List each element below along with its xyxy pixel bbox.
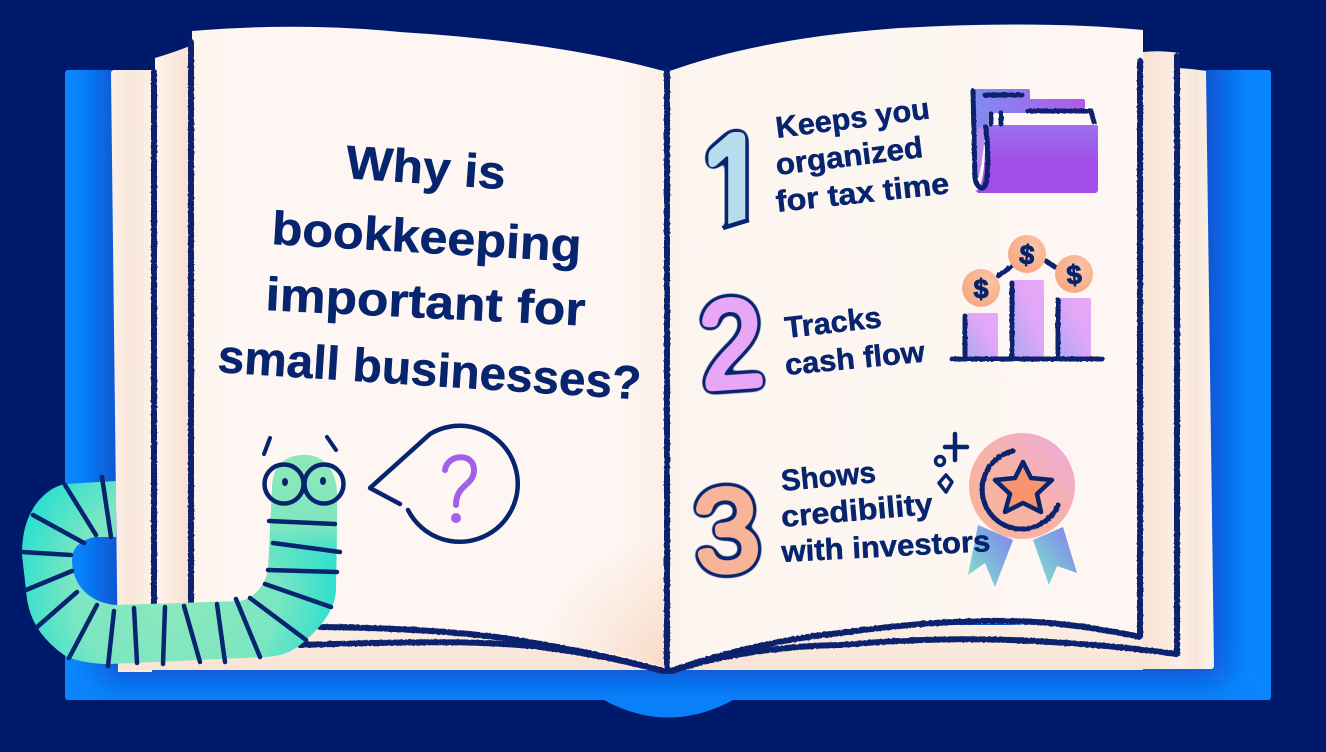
icon: bar chart with coins: $ — [1065, 259, 1083, 291]
item 3 text: credibility — [780, 488, 934, 534]
numeral 1 — [704, 128, 750, 230]
title: important for — [265, 267, 587, 336]
item 1 text: for tax time — [774, 167, 951, 219]
item 3 text — [780, 456, 991, 569]
item 3 text: with investors — [780, 525, 991, 569]
left page — [192, 27, 667, 668]
right page — [667, 24, 1143, 668]
numeral 1: 1 — [699, 100, 770, 279]
worm stripes — [22, 477, 340, 666]
numeral 2: 2 — [695, 274, 768, 416]
icon: folder — [973, 89, 1098, 193]
icon: bar chart with coins — [952, 235, 1102, 359]
item 2 text — [783, 301, 927, 382]
item 2 text: Tracks — [783, 301, 883, 345]
item 1 text: organized — [774, 131, 925, 182]
title — [216, 135, 643, 409]
worm — [22, 437, 344, 666]
book outline strokes — [154, 42, 1177, 671]
title: small businesses? — [216, 329, 643, 409]
page gutter shading — [567, 572, 664, 668]
worm eyes — [264, 437, 344, 504]
item 3 text: Shows — [780, 456, 877, 498]
speech bubble with question mark — [370, 426, 518, 542]
item 1 text: Keeps you — [774, 93, 932, 145]
page stacks — [111, 46, 1214, 672]
numeral 3: 3 — [690, 463, 764, 598]
title: bookkeeping — [270, 201, 583, 272]
item 2 text: cash flow — [784, 336, 927, 382]
icon: bar chart with coins: $ — [1018, 239, 1036, 271]
title: Why is — [344, 135, 508, 199]
icon: award medal — [936, 433, 1077, 587]
icon: bar chart with coins: $ — [973, 274, 989, 304]
item 1 text — [774, 93, 951, 219]
